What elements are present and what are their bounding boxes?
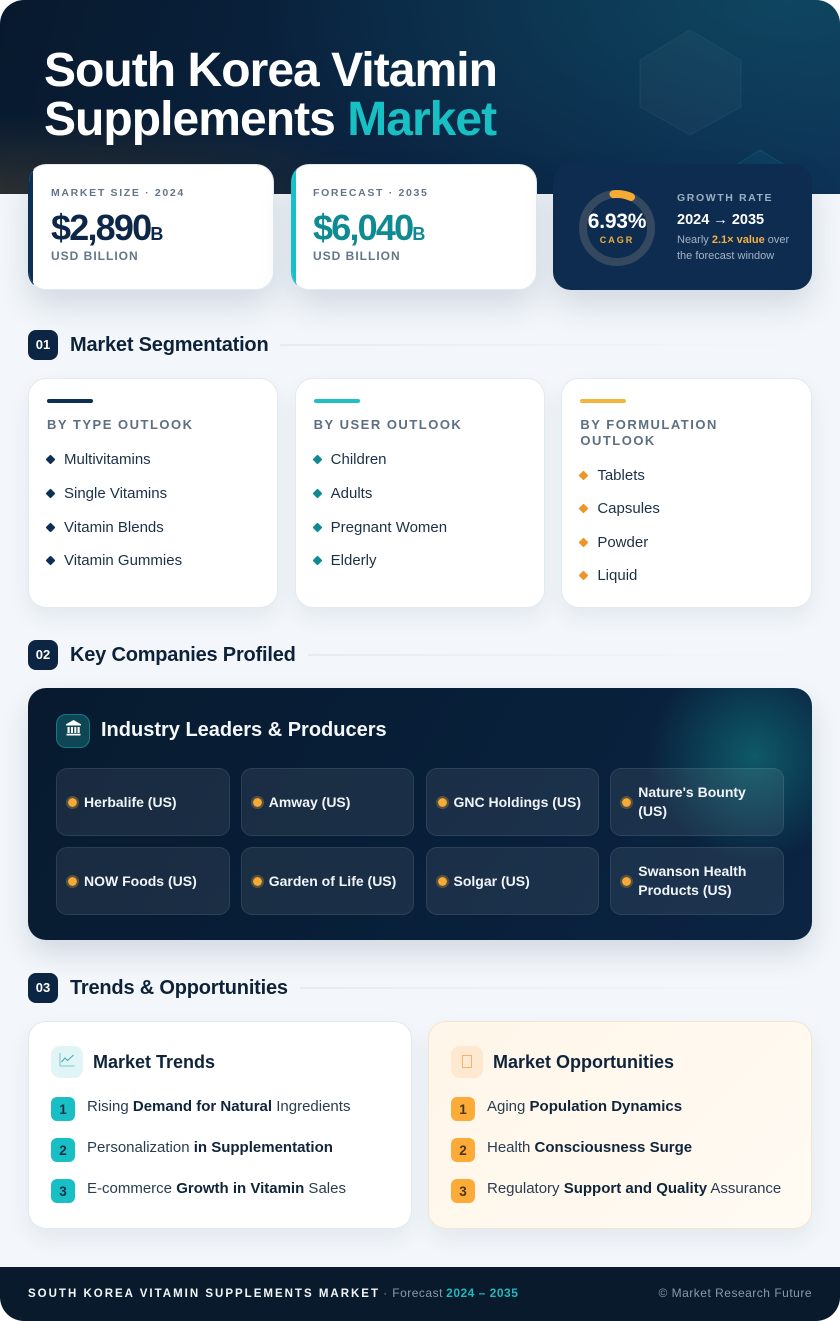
list item: Powder [597, 534, 648, 551]
list item: Multivitamins [64, 451, 151, 468]
panel title: Market Trends [93, 1052, 215, 1072]
trend 2 number: 2 [59, 1143, 67, 1158]
section title: Market Segmentation [70, 334, 268, 356]
list item: Capsules [597, 500, 660, 517]
title: Supplements Market [44, 93, 496, 146]
growth note: Nearly 2.1× value over [677, 234, 789, 246]
panel: market opportunities [428, 1021, 812, 1229]
section number [28, 640, 58, 670]
panel: by type outlook [28, 378, 278, 608]
panel: market trends [28, 1021, 412, 1229]
section number [28, 973, 58, 1003]
company: NOW Foods [56, 847, 230, 915]
section number: 03 [36, 980, 50, 995]
list item: Tablets [597, 467, 645, 484]
hero banner [0, 0, 840, 194]
CAGR ring [579, 190, 655, 266]
company: Garden of Life: Garden of Life (US) [269, 873, 396, 889]
list item [312, 485, 372, 502]
unit: USD BILLION [313, 249, 401, 263]
title [44, 44, 497, 146]
section heading: key companies [28, 640, 414, 670]
growth label: GROWTH RATE [677, 192, 773, 204]
trend 3 text: E-commerce Growth in Vitamin Sales [87, 1180, 346, 1197]
list item: Children [331, 451, 387, 468]
trend 3 number [51, 1179, 75, 1203]
growth note [677, 234, 789, 262]
company: GNC: GNC Holdings (US) [454, 794, 581, 810]
list item: Elderly [331, 552, 377, 569]
panel: by user outlook [295, 378, 545, 608]
value: $6,040B [313, 207, 425, 248]
company: Solgar: Solgar (US) [454, 873, 530, 889]
section number [28, 330, 58, 360]
icon: chart [51, 1046, 83, 1078]
copyright: © Market Research Future [658, 1286, 812, 1300]
trend 1 text: Rising Demand for Natural Ingredients [87, 1098, 350, 1115]
panel heading: BY USER OUTLOOK [314, 417, 462, 432]
company: Amway [241, 768, 414, 836]
label: FORECAST · 2035 [313, 187, 428, 199]
company: Herbalife [56, 768, 230, 836]
period: 2024 → 2035 [677, 212, 764, 228]
opportunity 3 number [451, 1179, 475, 1203]
panel: by formulation outlook [561, 378, 812, 608]
growth note: the forecast window [677, 250, 774, 262]
opportunity 1 number [451, 1097, 475, 1121]
company: Swanson [610, 847, 784, 915]
opportunity 2 number: 2 [459, 1143, 467, 1158]
icon: missing glyph box [451, 1046, 483, 1078]
panel heading: BY TYPE OUTLOOK [47, 417, 194, 432]
list item: Single Vitamins [64, 485, 167, 502]
trend 2 number [51, 1138, 75, 1162]
opportunity 2 text: Health Consciousness Surge [487, 1139, 692, 1156]
title: South Korea Vitamin [44, 44, 497, 97]
company: Herbalife: Herbalife (US) [84, 794, 177, 810]
decorative hexagons [640, 30, 784, 164]
trend 1 number [51, 1097, 75, 1121]
stat card: market size [28, 164, 274, 290]
list item: Vitamin Blends [64, 519, 164, 536]
opportunity 2 number [451, 1138, 475, 1162]
company: Garden of Life [241, 847, 414, 915]
list item [579, 567, 637, 584]
stat card: growth rate [553, 164, 812, 290]
section heading: market segmentation [28, 330, 392, 360]
company: Nature's Bounty [610, 768, 784, 836]
CAGR value: 6.93% [588, 210, 646, 233]
section number: 02 [36, 647, 50, 662]
company: GNC [426, 768, 599, 836]
opportunity 1 number: 1 [459, 1102, 467, 1117]
panel heading: BY FORMULATION OUTLOOK [580, 417, 718, 448]
CAGR label: CAGR [600, 235, 634, 245]
list item: Pregnant Women [331, 519, 447, 536]
icon: institution [56, 714, 90, 748]
list item: Adults [331, 485, 372, 502]
label: MARKET SIZE · 2024 [51, 187, 185, 199]
company: NOW Foods: NOW Foods (US) [84, 873, 197, 889]
unit: USD BILLION [51, 249, 139, 263]
company: Amway: Amway (US) [269, 794, 350, 810]
section title: Trends & Opportunities [70, 977, 288, 999]
list item: Liquid [597, 567, 637, 584]
footer title: SOUTH KOREA VITAMIN SUPPLEMENTS MARKET · Forecast 2024 – 2035 [28, 1286, 518, 1300]
company: Solgar [426, 847, 599, 915]
company: Nature's Bounty: Nature's Bounty (US) [638, 784, 746, 819]
opportunity 1 text: Aging Population Dynamics [487, 1098, 682, 1115]
panel title: Industry Leaders & Producers [101, 719, 387, 741]
trend 2 text: Personalization in Supplementation [87, 1139, 333, 1156]
footer [0, 1267, 840, 1321]
opportunity 3 text: Regulatory Support and Quality Assurance [487, 1180, 781, 1197]
section heading: trends [28, 973, 408, 1003]
trend 3 number: 3 [59, 1184, 67, 1199]
opportunity 3 number: 3 [459, 1184, 467, 1199]
section number: 01 [36, 337, 50, 352]
section title: Key Companies Profiled [70, 644, 296, 666]
list item: Vitamin Gummies [64, 552, 182, 569]
panel: companies [28, 688, 812, 940]
company: Swanson: Swanson Health Products (US) [638, 863, 746, 898]
value: $2,890B [51, 207, 163, 248]
stat card: forecast [291, 164, 537, 290]
panel title: Market Opportunities [493, 1052, 674, 1072]
trend 1 number: 1 [59, 1102, 67, 1117]
